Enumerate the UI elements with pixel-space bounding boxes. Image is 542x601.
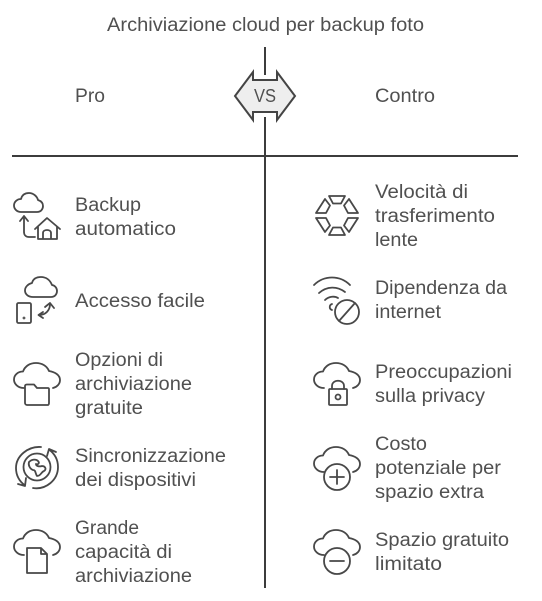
text: Dipendenza da internet: internet [375,302,442,323]
text: Grande capacità di archiviazione [75,518,192,587]
text: Velocità di trasferimento lente: trasferimento [375,206,495,227]
text: Velocità di trasferimento lente: lente [375,230,418,251]
text: Opzioni di archiviazione gratuite [75,350,192,419]
text: Costo potenziale per spazio extra: potenziale per [375,458,502,479]
icon: globe with sync arrows [16,447,58,488]
horizontal divider [12,155,518,157]
text: Preoccupazioni sulla privacy: sulla privacy [375,386,486,407]
text: Dipendenza da internet: Dipendenza da [375,278,507,299]
text: Backup automatico [75,195,176,240]
VS badge: VS [254,86,276,106]
heading: Pro: Pro [75,86,105,107]
text: Opzioni di archiviazione gratuite: archiviazione [75,374,192,395]
text: Opzioni di archiviazione gratuite: Opzioni di [75,350,163,371]
icon: slow transfer hexagon [316,196,358,235]
text: Costo potenziale per spazio extra [375,434,502,503]
icon: cloud with upload from home [14,193,60,239]
panel: Pro [14,193,226,587]
text: Spazio gratuito limitato [375,530,509,575]
icon: cloud with plus [314,447,360,490]
heading: Contro: Contro [375,86,435,107]
icon: cloud with lock [314,363,360,405]
icon: cloud with minus [314,530,360,574]
text: Backup automatico: Backup [75,195,141,216]
text: Sincronizzazione dei dispositivi: dei dispositivi [75,470,196,491]
text: Velocità di trasferimento lente: Velocità di [375,182,468,203]
vertical divider [264,47,266,588]
text: Sincronizzazione dei dispositivi [75,446,226,491]
text: Grande capacità di archiviazione: capacità di [75,542,172,563]
text: Costo potenziale per spazio extra: Costo [375,434,427,455]
text: Velocità di trasferimento lente [375,182,495,251]
panel: Contro [314,182,512,575]
title: Archiviazione cloud per backup foto [107,15,424,36]
text: Sincronizzazione dei dispositivi: Sincronizzazione [75,446,226,467]
text: Preoccupazioni sulla privacy [375,362,512,407]
text: Costo potenziale per spazio extra: spazio extra [375,482,484,503]
text: Spazio gratuito limitato: Spazio gratuito [375,530,509,551]
text: Dipendenza da internet [375,278,507,323]
icon: no wifi [314,278,359,324]
text: Preoccupazioni sulla privacy: Preoccupazioni [375,362,512,383]
icon: cloud with folder [14,363,60,405]
text: Grande capacità di archiviazione: Grande [75,518,139,539]
icon: cloud with phone sync [17,277,57,323]
text: Accesso facile: Accesso facile [75,291,205,312]
text: Backup automatico: automatico [75,219,176,240]
icon: cloud with document [14,530,60,573]
text: Spazio gratuito limitato: limitato [375,554,442,575]
VS badge [235,72,295,120]
text: Grande capacità di archiviazione: archiviazione [75,566,192,587]
text: Opzioni di archiviazione gratuite: gratuite [75,398,143,419]
